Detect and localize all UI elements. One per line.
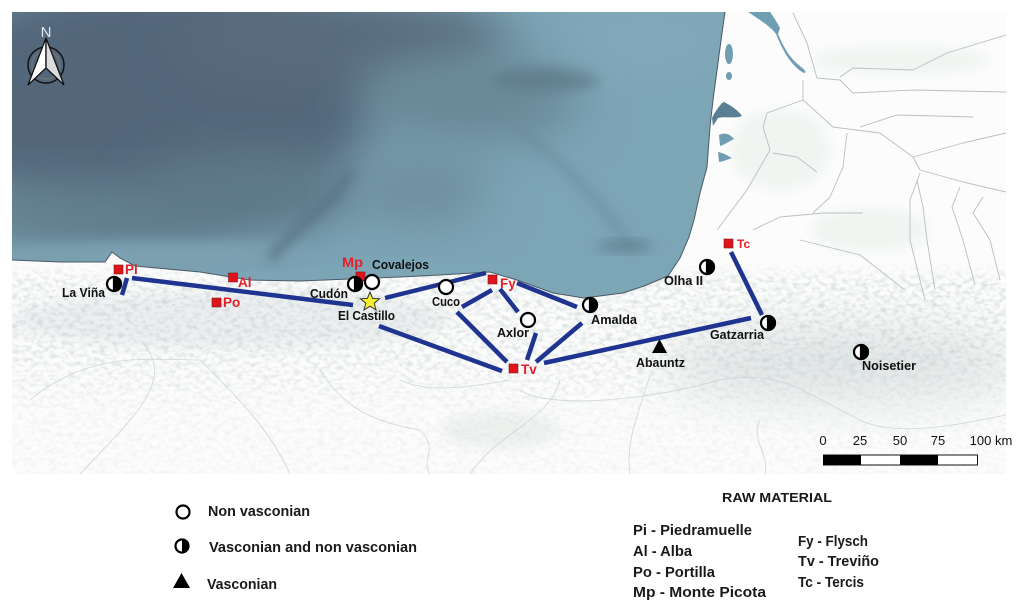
scale bar: 100 km xyxy=(970,433,1012,448)
site: Axlor: Axlor xyxy=(497,326,529,340)
site: El Castillo xyxy=(338,292,395,323)
source: Tc xyxy=(724,237,750,251)
source: Po xyxy=(212,295,240,310)
site: Olha II xyxy=(664,260,714,288)
raw material list right xyxy=(798,534,879,591)
site: La Viña xyxy=(62,277,121,300)
site: Abauntz xyxy=(636,339,685,370)
terrain texture xyxy=(12,262,1006,474)
site: Cudón xyxy=(310,277,362,301)
site: Amalda: Amalda xyxy=(591,313,638,327)
raw material heading: RAW MATERIAL xyxy=(722,490,832,505)
source: Tv: Tv xyxy=(521,362,537,377)
source: Pi: Pi xyxy=(125,262,138,277)
legend item: non vasconian: Non vasconian xyxy=(208,504,310,520)
site: El Castillo: El Castillo xyxy=(338,309,395,323)
land tint xyxy=(10,45,1020,448)
scale bar: 25 xyxy=(853,433,867,448)
site: Cudón: Cudón xyxy=(310,287,348,301)
raw material list right: Fy - Flysch xyxy=(798,534,868,550)
raw material list left xyxy=(633,523,767,601)
raw material list left: Pi - Piedramuelle xyxy=(633,523,752,539)
site: Cuco xyxy=(432,280,460,309)
raw material list right: Tv - Treviño xyxy=(798,554,879,570)
source: Mp: Mp xyxy=(342,255,363,270)
estuary and lagoons xyxy=(712,12,806,162)
site: Gatzarria: Gatzarria xyxy=(710,328,765,342)
legend item: vasconian xyxy=(173,573,277,593)
connection lines xyxy=(122,252,762,371)
source: Al: Al xyxy=(238,275,252,290)
raw material sources xyxy=(114,237,750,377)
scale bar: 50 xyxy=(893,433,907,448)
icon: north arrow xyxy=(28,24,64,85)
icon: north arrow: N xyxy=(41,24,51,41)
source: Pi xyxy=(114,262,138,277)
rivers xyxy=(30,13,1006,474)
archaeological sites xyxy=(62,258,916,373)
site: Covalejos: Covalejos xyxy=(372,258,429,272)
site: Abauntz: Abauntz xyxy=(636,356,685,370)
source: Mp xyxy=(342,255,365,281)
site: La Viña: La Viña xyxy=(62,286,106,300)
scale bar: 0 xyxy=(819,433,827,448)
raw material list left: Mp - Monte Picota xyxy=(633,585,767,601)
scale bar: 75 xyxy=(931,433,945,448)
source: Al xyxy=(228,273,252,290)
site: Gatzarria xyxy=(710,316,775,342)
sea xyxy=(0,0,732,302)
legend item: vasconian: Vasconian xyxy=(207,577,277,593)
legend: raw material xyxy=(633,490,879,601)
coastline xyxy=(12,12,725,298)
site: Noisetier xyxy=(854,345,916,373)
site: Olha II: Olha II xyxy=(664,274,703,288)
source: Po: Po xyxy=(223,295,240,310)
site: Axlor xyxy=(497,313,535,340)
site: Noisetier: Noisetier xyxy=(862,359,916,373)
source: Tv xyxy=(509,362,537,377)
source: Fy: Fy xyxy=(500,276,516,291)
site: Cuco: Cuco xyxy=(432,295,460,309)
legend: site types xyxy=(173,504,417,593)
site: Covalejos xyxy=(365,258,429,289)
raw material list right: Tc - Tercis xyxy=(798,575,864,591)
land base xyxy=(12,12,1006,474)
raw material list left: Al - Alba xyxy=(633,544,693,560)
legend item: vasconian and non vasconian: Vasconian and non vasconian xyxy=(209,540,417,556)
source: Fy xyxy=(488,275,516,291)
site: Amalda xyxy=(583,298,638,327)
source: Tc: Tc xyxy=(737,237,750,251)
map panel xyxy=(0,0,1020,474)
scale bar xyxy=(819,433,1012,465)
raw material list left: Po - Portilla xyxy=(633,565,716,581)
